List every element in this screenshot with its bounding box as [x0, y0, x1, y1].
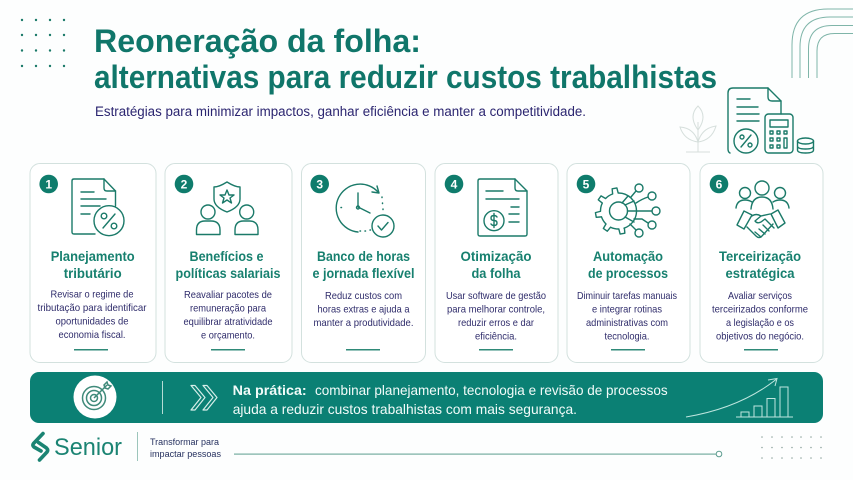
decorative arches: top right	[792, 9, 853, 78]
callout text	[233, 382, 668, 417]
tagline: Transformar para	[150, 437, 219, 447]
tagline: impactar pessoas	[150, 449, 221, 459]
icon: gear with nodes	[595, 184, 660, 237]
heading: e jornada flexível	[312, 265, 414, 281]
text block: Avaliar serviços	[728, 291, 792, 302]
number badge 1	[39, 175, 58, 193]
text block: Reduz custos com	[325, 291, 402, 302]
heading	[588, 248, 668, 281]
icon: plant	[680, 106, 716, 152]
dot grid: bottom right	[761, 436, 822, 459]
text block: e orçamento.	[201, 330, 255, 342]
number badge 3	[310, 175, 329, 193]
icon: team and handshake	[736, 181, 789, 238]
number badge 2: 2	[181, 178, 188, 192]
number badge 6: 6	[716, 178, 723, 192]
callout text: ajuda a reduzir custos trabalhistas com mais segurança.	[233, 401, 577, 417]
heading: Terceirização	[719, 248, 801, 264]
heading: políticas salariais	[176, 265, 281, 281]
heading: Benefícios e	[190, 248, 264, 264]
number badge 4: 4	[451, 178, 458, 192]
text block: e integrar rotinas	[592, 304, 662, 316]
icon: tax document	[72, 179, 124, 236]
text block: terceirizados conforme	[712, 304, 808, 316]
heading: Otimização	[460, 248, 532, 264]
banner: na prática	[30, 372, 823, 423]
text block: oportunidades de	[56, 316, 129, 328]
text block: economia fiscal.	[58, 330, 126, 341]
number badge 4	[445, 175, 463, 193]
title: Reoneração da folha:	[94, 23, 421, 59]
subtitle: Estratégias para minimizar impactos, ganhar eficiência e manter a competitividade.	[95, 104, 586, 119]
icon: payroll document	[478, 179, 527, 236]
text block	[577, 291, 677, 342]
panel: card 1	[30, 164, 156, 362]
callout text: Na prática:	[233, 382, 307, 398]
heading: de processos	[588, 265, 668, 281]
title: alternativas para reduzir custos trabalhistas	[94, 59, 717, 95]
icon: document with calculator and coins	[728, 88, 814, 153]
icon: double chevron	[191, 386, 217, 410]
text block: a legislação e os	[726, 318, 794, 329]
text block: Diminuir tarefas manuais	[577, 291, 677, 302]
number badge 2	[175, 175, 193, 193]
text block	[446, 291, 546, 342]
panel: card 4	[435, 164, 558, 362]
heading	[51, 248, 135, 281]
text block	[314, 291, 414, 329]
panel: card 6	[700, 164, 823, 362]
dot grid: top left	[21, 19, 65, 67]
text block: remuneração para	[190, 304, 266, 314]
heading: Automação	[593, 248, 663, 264]
heading	[176, 248, 281, 281]
text block: eficiência.	[475, 332, 517, 342]
tagline	[150, 437, 221, 459]
timeline line with end marker	[234, 451, 722, 457]
callout text: combinar planejamento, tecnologia e revisão de processos	[315, 382, 668, 398]
text block: administrativas com	[586, 318, 668, 329]
number badge 5	[577, 175, 595, 193]
text block: Usar software de gestão	[446, 291, 546, 302]
icon: shield and people	[196, 182, 258, 234]
text block	[38, 290, 147, 341]
logo: Senior: Senior	[54, 434, 122, 461]
number badge 3: 3	[316, 178, 323, 192]
title	[94, 23, 717, 95]
heading	[719, 248, 801, 281]
panel: card 3	[302, 164, 426, 362]
text block: Reavaliar pacotes de	[184, 290, 272, 301]
text block: Revisar o regime de	[50, 290, 134, 300]
text block: horas extras e ajuda a	[318, 304, 410, 316]
heading: Banco de horas	[317, 248, 410, 264]
heading: da folha	[472, 265, 521, 281]
text block: para melhorar controle,	[447, 304, 545, 316]
icon: target	[74, 376, 116, 418]
text block	[712, 291, 808, 342]
number badge 1: 1	[45, 178, 52, 192]
text block: manter a produtividade.	[314, 318, 414, 329]
heading	[460, 248, 532, 281]
text block: equilibrar atratividade	[184, 317, 273, 328]
heading: Planejamento	[51, 248, 135, 264]
text block: tecnologia.	[604, 332, 650, 342]
number badge 6	[710, 175, 728, 193]
panel: card 5	[567, 164, 690, 362]
text block: reduzir erros e dar	[458, 318, 535, 329]
icon: growth chart	[686, 378, 793, 417]
heading	[312, 248, 414, 281]
heading: tributário	[64, 265, 122, 281]
icon: clock with check	[336, 184, 394, 237]
text block	[184, 290, 273, 342]
heading: estratégica	[726, 265, 795, 281]
number badge 5: 5	[583, 178, 590, 192]
text block: tributação para identificar	[38, 303, 147, 314]
text block: objetivos do negócio.	[716, 332, 804, 342]
panel: card 2	[165, 164, 292, 362]
